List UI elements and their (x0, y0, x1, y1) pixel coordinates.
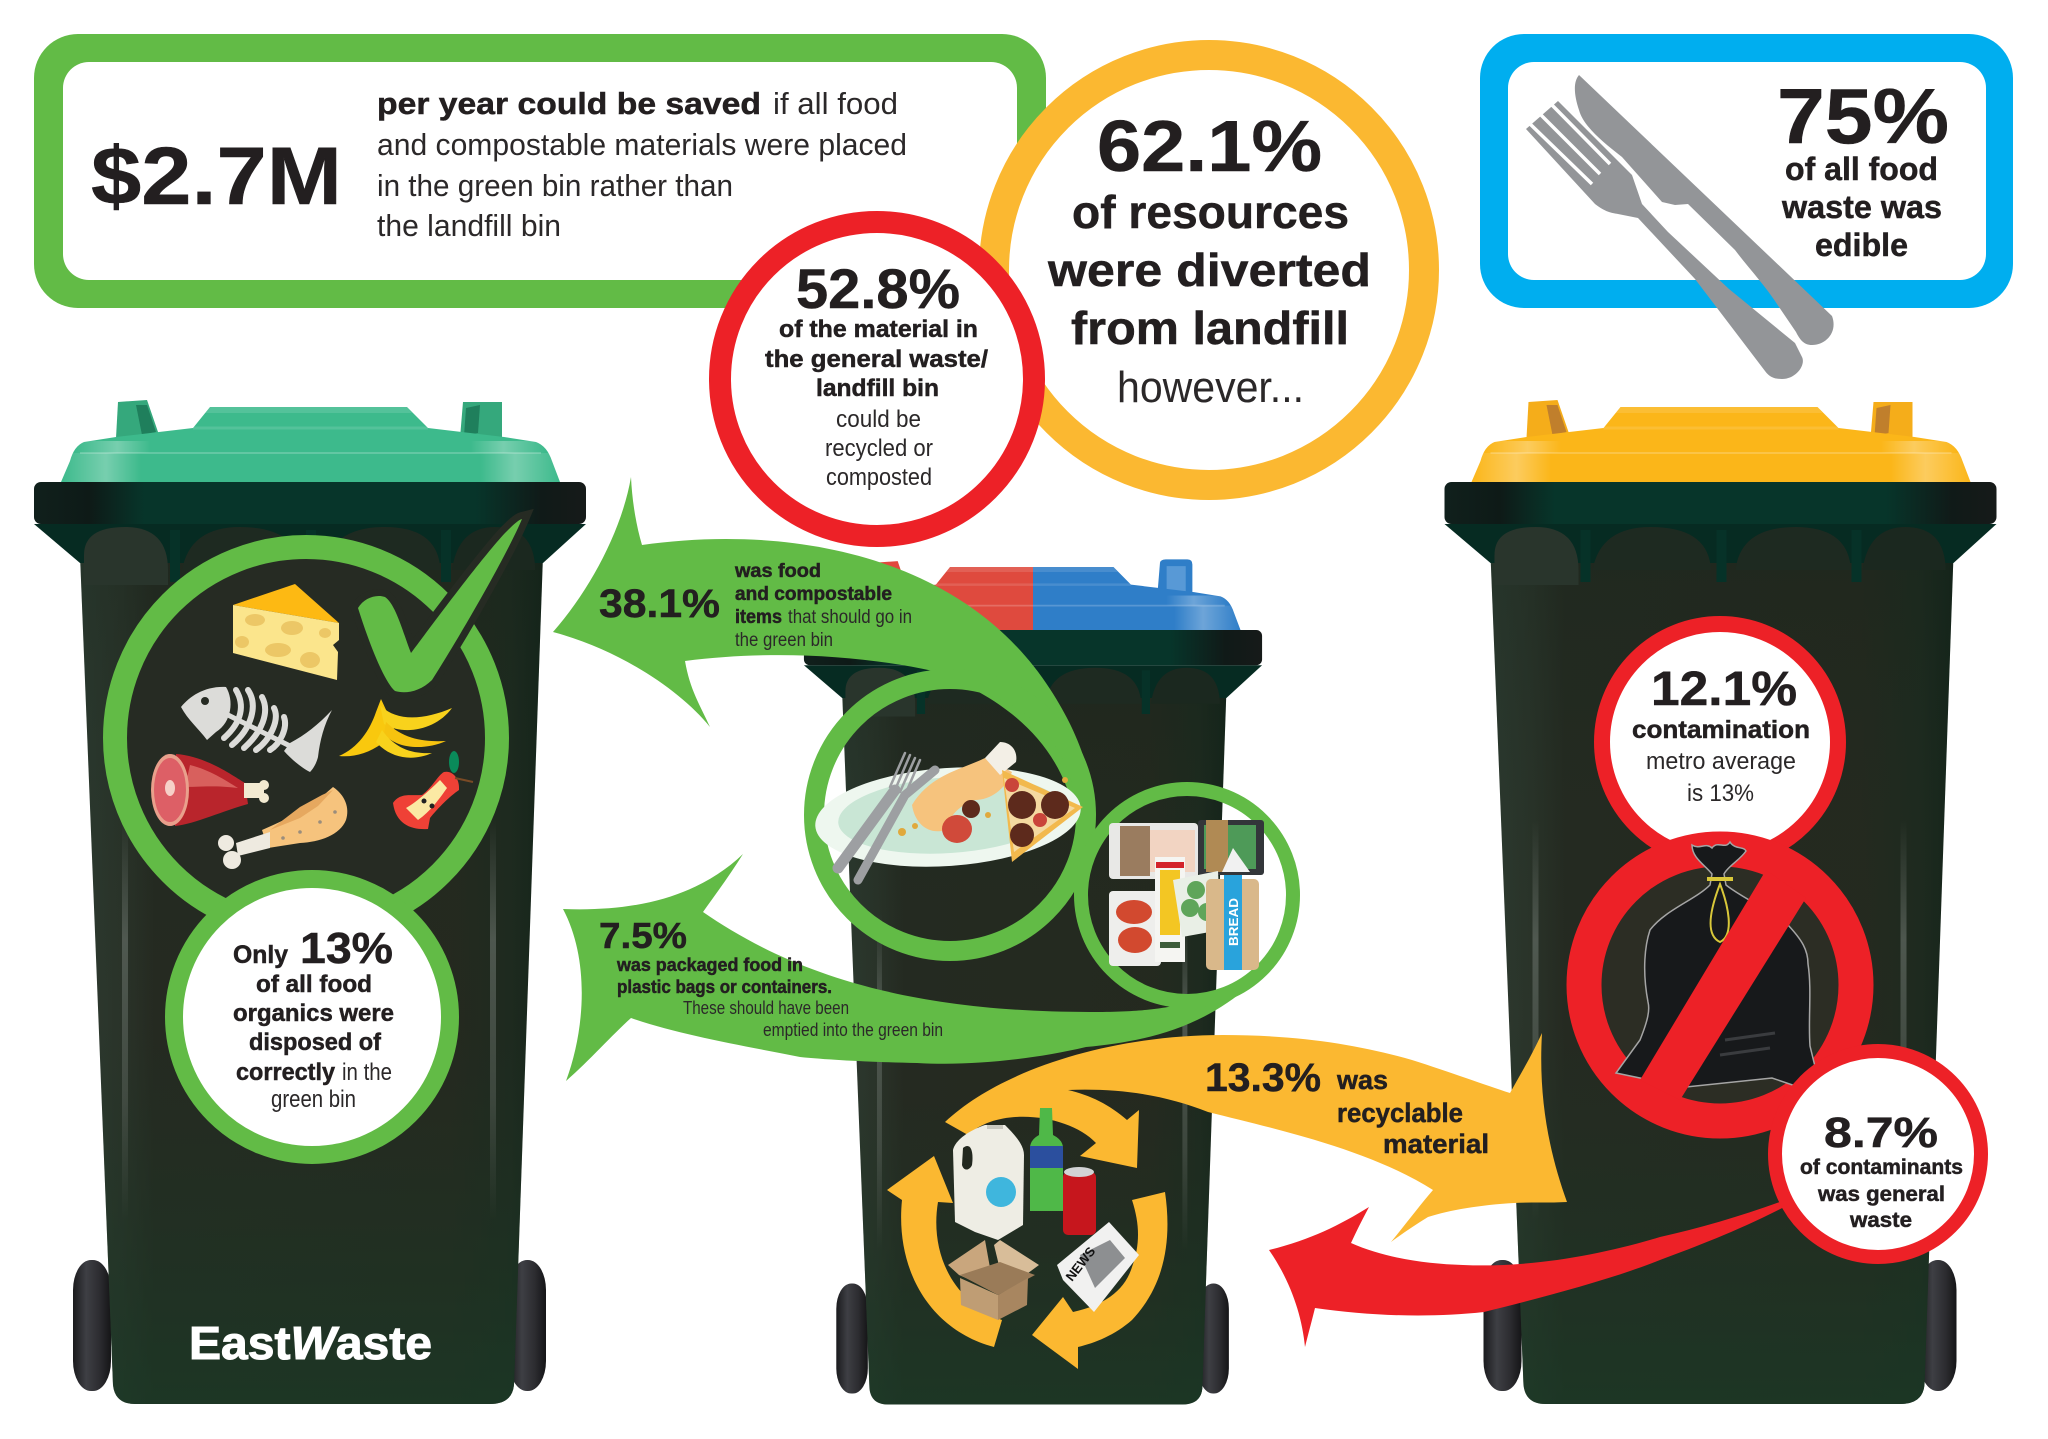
panel: edible food (1480, 34, 2013, 308)
icon: ham (151, 754, 269, 826)
panel: resources diverted (994, 55, 1424, 485)
callout figure: 13% (300, 924, 393, 973)
diverted text: however... (1117, 363, 1304, 412)
arrow: food and compostable (553, 477, 1096, 815)
landfill text: of the material in (779, 316, 978, 343)
panel: general waste share (1775, 1051, 1981, 1257)
soda bottle (1030, 1108, 1063, 1211)
icon: fish skeleton (181, 687, 332, 772)
contamination text: is 13% (1687, 780, 1754, 807)
arrow: packaged food (563, 854, 1250, 1081)
icon: recycling arrows (887, 1156, 1167, 1369)
prohibition slash (1640, 870, 1806, 1100)
landfill text: could be (836, 406, 921, 433)
callout text: correctly (236, 1059, 336, 1086)
edible text: edible (1815, 227, 1908, 263)
diverted text (1047, 186, 1371, 412)
contamination figure: 12.1% (1651, 663, 1797, 716)
pasta packet (1155, 857, 1185, 962)
bin: red and blue lid bin (804, 559, 1262, 1404)
callout figure (233, 924, 393, 973)
edible figure: 75% (1777, 72, 1949, 160)
landfill text: composted (826, 464, 932, 491)
broccoli bag (1173, 871, 1221, 937)
savings text: and compostable materials were placed (377, 127, 907, 162)
landfill text: the general waste/ (765, 346, 988, 373)
arrow text (734, 561, 912, 651)
share figure: 8.7% (1824, 1109, 1938, 1157)
callout text (233, 971, 394, 1113)
drink can (1063, 1167, 1096, 1235)
savings text: the landfill bin (377, 208, 561, 243)
arrow text: recyclable (1337, 1098, 1463, 1128)
icon: check mark (358, 519, 522, 692)
contamination text (1632, 716, 1810, 807)
bin: yellow lid bin (1444, 400, 1996, 1404)
icon: cheese (233, 584, 339, 680)
savings text: in the green bin rather than (377, 168, 733, 203)
callout text: organics were (233, 1000, 394, 1027)
logo: EastWaste: EastWaste (189, 1317, 432, 1369)
callout text: in the (342, 1059, 392, 1086)
edible text: of all food (1785, 151, 1938, 187)
arrow text: was (1336, 1065, 1388, 1095)
diverted text: from landfill (1071, 302, 1349, 354)
share text: waste (1849, 1209, 1912, 1232)
cardboard box (948, 1240, 1039, 1320)
panel: savings (34, 34, 1046, 308)
arrow text: and compostable (735, 584, 892, 605)
diverted text: were diverted (1047, 244, 1371, 296)
icon: plate of leftovers (812, 679, 1086, 951)
icon: no rubbish bags sign (1584, 842, 1856, 1121)
landfill text (765, 316, 988, 491)
tomato tray (1109, 891, 1161, 966)
callout figure: Only (233, 941, 288, 969)
milk jug (953, 1125, 1024, 1240)
icon: banana peel (339, 699, 452, 758)
share text: was general (1817, 1183, 1945, 1206)
yellow lid (1472, 400, 1970, 482)
newspaper (1057, 1222, 1139, 1312)
panel: contamination rate (1602, 624, 1838, 860)
arrow text: was packaged food in (616, 955, 803, 975)
icon: recyclables (948, 1108, 1139, 1320)
panel: 13 percent callout (174, 879, 450, 1155)
icon: apple core (393, 751, 473, 829)
arrow text: the green bin (735, 630, 833, 651)
icon: packaged food (1081, 789, 1293, 1001)
arrow text: These should have been (683, 998, 849, 1018)
bread loaf: BREAD (1226, 898, 1241, 946)
landfill text: landfill bin (816, 375, 939, 402)
arrow text: plastic bags or containers. (617, 977, 832, 997)
edible text: waste was (1781, 189, 1942, 225)
arrow figure: 7.5% (599, 915, 687, 956)
plate (812, 742, 1084, 875)
green lid (61, 400, 560, 482)
arrow figure: 13.3% (1205, 1056, 1321, 1100)
share text (1800, 1156, 1963, 1232)
newspaper: NEWS (1063, 1244, 1099, 1284)
arrow text: that should go in (788, 607, 912, 628)
savings text (377, 86, 907, 243)
contamination text: metro average (1646, 748, 1796, 775)
arrow figure: 38.1% (599, 582, 720, 626)
arrow text: items (735, 607, 782, 628)
chicken tray (1109, 823, 1198, 879)
landfill text: recycled or (825, 435, 933, 462)
contamination text: contamination (1632, 716, 1810, 744)
savings text: per year could be saved (377, 86, 761, 121)
panel: recyclable in landfill bin (720, 222, 1034, 536)
share text: of contaminants (1800, 1156, 1963, 1179)
arrow: general waste (1269, 1200, 1790, 1347)
savings figure: $2.7M (91, 131, 342, 222)
callout text: of all food (256, 971, 372, 998)
edible text (1781, 151, 1942, 263)
bread loaf (1206, 875, 1259, 970)
arrow text (1336, 1065, 1489, 1159)
red and blue lid (879, 559, 1240, 630)
icon: chicken drumstick (218, 787, 347, 869)
salad tray (1198, 820, 1264, 875)
arrow text: material (1383, 1129, 1489, 1159)
diverted text: of resources (1072, 186, 1349, 238)
arrow: recyclable material (945, 1033, 1567, 1242)
fork and knife (838, 753, 935, 880)
callout text: disposed of (249, 1029, 382, 1056)
landfill figure: 52.8% (796, 257, 960, 320)
arrow text (616, 955, 943, 1040)
icon: knife and fork (1526, 75, 1834, 379)
arrow text: emptied into the green bin (763, 1020, 943, 1040)
arrow text: was food (734, 561, 821, 582)
savings text: if all food (773, 86, 898, 121)
callout text: green bin (271, 1086, 356, 1113)
panel: green bin food contents (115, 519, 522, 929)
rubbish bag (1616, 842, 1822, 1095)
bin: green lid bin (34, 400, 586, 1404)
diverted figure: 62.1% (1097, 107, 1322, 187)
